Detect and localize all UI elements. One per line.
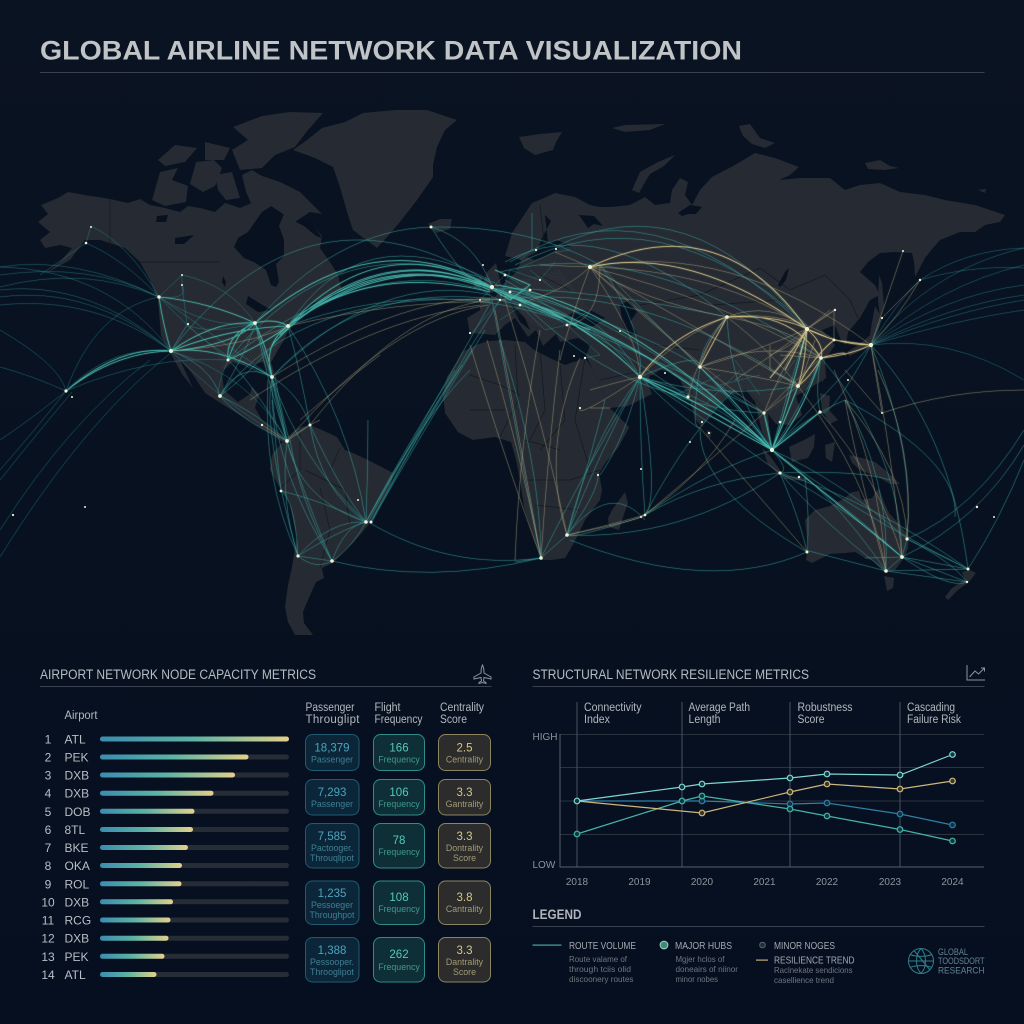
y axis labels (532, 732, 558, 871)
row 6: 8TL: 8TL (64, 823, 86, 837)
card: passenger 7,585: Throuqlipot (310, 853, 355, 863)
card: frequency 106: Frequency (378, 799, 420, 809)
land: africa (443, 340, 629, 560)
card: passenger 7,293 (306, 780, 359, 815)
legend: route volume (532, 941, 636, 984)
chart series headers: Connectivity (584, 702, 642, 714)
logo: global research: TOODSDORT (938, 956, 985, 966)
card: passenger 1,235: Throughpot (310, 910, 355, 920)
row 9: ROL: ROL (64, 877, 90, 891)
card: centrality 3.3: Gantrality (446, 799, 484, 809)
row 7: BKE: BKE (64, 841, 89, 855)
card: passenger 18,379 (306, 734, 359, 770)
column headers: Flight (374, 702, 401, 714)
panel: airport node capacity metrics (40, 665, 492, 982)
land: south america (270, 425, 393, 635)
row 6: 8TL (45, 823, 289, 837)
row 14: ATL (41, 968, 289, 982)
row 12: DXB: 12 (41, 932, 55, 946)
row 6: 8TL: 6 (45, 823, 52, 837)
chart series headers: Failure Risk (907, 714, 961, 726)
legend: resilience trend: casellience trend (774, 975, 834, 985)
land: islands (428, 124, 986, 600)
land: greenland (293, 110, 457, 248)
card: centrality 3.8: 3.8 (456, 892, 472, 904)
column headers: Score (440, 714, 467, 726)
land: eurasia (467, 153, 1005, 452)
y axis labels: LOW (532, 860, 556, 871)
legend: major hubs: doneairs of niinor (676, 964, 738, 974)
row 10: DXB: DXB (64, 895, 89, 909)
legend: resilience trend (756, 956, 854, 985)
column headers: Passenger (306, 702, 355, 714)
row 8: OKA (45, 859, 289, 873)
row 9: ROL: 9 (45, 877, 52, 891)
legend: major hubs: minor nobes (676, 974, 718, 984)
x axis years: 2018 (566, 877, 589, 888)
card: centrality 3.8 (438, 881, 490, 924)
card: passenger 1,235 (306, 881, 359, 924)
row 10: DXB: 10 (41, 895, 55, 909)
row 4: DXB: 4 (45, 787, 52, 801)
series: gold resilience trend (577, 778, 955, 816)
card: centrality 2.5: 2.5 (456, 742, 472, 754)
airport nodes (12, 226, 995, 583)
card: frequency 78: 78 (393, 835, 405, 847)
card: frequency 166: 166 (389, 742, 409, 754)
row 13: PEK: PEK (64, 950, 89, 964)
logo: global research: GLOBAL (938, 947, 968, 957)
row 11: RCG: 11 (42, 914, 55, 928)
chart series headers: Index (584, 714, 610, 726)
land: madagascar (608, 492, 628, 530)
heading: capacity metrics: AIRPORT NETWORK NODE CAPACITY METRICS (40, 667, 316, 682)
card: frequency 262: Frequency (378, 962, 420, 972)
card: passenger 7,585 (306, 824, 359, 868)
card: frequency 262 (374, 938, 424, 982)
row 4: DXB (45, 787, 289, 801)
row 8: OKA: OKA (64, 859, 90, 873)
row 14: ATL: 14 (41, 968, 55, 982)
card: centrality 3.3: 3.3 (456, 787, 472, 799)
legend: route volume: through tciis olid (569, 964, 631, 974)
route network arcs (0, 213, 1024, 584)
row 4: DXB: DXB (64, 787, 89, 801)
card: centrality 3.3 score: Score (453, 853, 476, 863)
row 2: PEK: 2 (45, 750, 52, 764)
row 7: BKE: 7 (45, 841, 52, 855)
x axis years (566, 877, 964, 888)
row 5: DOB: 5 (45, 805, 52, 819)
row 5: DOB: DOB (64, 805, 91, 819)
row 10: DXB (41, 895, 289, 909)
card: frequency 78: Frequency (378, 847, 420, 857)
series: blue (577, 798, 955, 828)
series: teal falling (574, 793, 955, 844)
card: frequency 78 (374, 824, 424, 868)
routes: teal thin (0, 226, 287, 557)
row 3: DXB: DXB (64, 768, 89, 782)
row 12: DXB: DXB (64, 932, 89, 946)
chart series headers (584, 702, 961, 726)
card: centrality 3.3 score (438, 938, 490, 982)
card: centrality 3.3 (438, 780, 490, 815)
panel: structural network resilience metrics (532, 665, 985, 888)
card: centrality 3.3 score: 3.3 (456, 831, 472, 843)
card: passenger 1,388: Throoglipot (310, 967, 355, 977)
legend: resilience trend: Raclnekate sendicions (774, 965, 852, 975)
row 3: DXB (45, 768, 289, 782)
y axis labels: HIGH (532, 732, 558, 743)
logo: global research (908, 947, 985, 976)
row 9: ROL (45, 877, 289, 891)
heading: legend: LEGEND (532, 907, 582, 922)
column headers: Frequency (374, 714, 423, 726)
legend: route volume: discoonery routes (569, 974, 634, 984)
card: passenger 1,235: Pessoeger (311, 900, 353, 910)
legend: major hubs: Mgjer hclos of (676, 954, 725, 964)
land: north america (38, 112, 341, 443)
x axis years: 2020 (691, 877, 714, 888)
row 2: PEK: PEK (64, 750, 89, 764)
card: passenger 1,388 (306, 938, 359, 982)
card: passenger 7,585: Pactooger. (311, 843, 353, 853)
card: frequency 108: Frequency (378, 904, 420, 914)
card: passenger 7,585: 7,585 (318, 831, 346, 843)
card: passenger 7,293: 7,293 (318, 787, 346, 799)
line chart (532, 702, 984, 888)
row 1: ATL (45, 732, 289, 746)
routes: gold bright (590, 246, 871, 386)
row 1: ATL: 1 (45, 732, 52, 746)
city light texture (215, 270, 825, 412)
card: frequency 166: Frequency (378, 754, 420, 764)
legend: resilience trend: RESILIENCE TREND (774, 956, 854, 966)
logo: global research: RESEARCH (938, 966, 984, 976)
chart series headers: Average Path (688, 702, 750, 714)
card: frequency 166 (374, 734, 424, 770)
row 2: PEK (45, 750, 289, 764)
chart series headers: Cascading (907, 702, 955, 714)
card: passenger 18,379: Passenger (311, 754, 353, 764)
row 13: PEK (41, 950, 289, 964)
card: passenger 7,293: Passenger (311, 799, 353, 809)
x axis years: 2021 (753, 877, 776, 888)
x axis years: 2024 (941, 877, 964, 888)
column headers: Centrality (440, 702, 484, 714)
legend: major hubs (660, 941, 738, 984)
row 7: BKE (45, 841, 289, 855)
x axis years: 2023 (879, 877, 902, 888)
row 14: ATL: ATL (64, 968, 86, 982)
row 3: DXB: 3 (45, 768, 52, 782)
legend: route volume: Route valame of (569, 954, 628, 964)
card: passenger 18,379: 18,379 (314, 742, 350, 754)
legend: minor nodes: MINOR NOGES (774, 941, 835, 952)
card: passenger 1,388: 1,388 (318, 945, 346, 957)
routes: dense regional mesh (470, 250, 795, 405)
card: frequency 106 (374, 780, 424, 815)
card: frequency 262: 262 (389, 949, 409, 961)
card: centrality 3.3 score: Score (453, 967, 476, 977)
legend: route volume: ROUTE VOLUME (569, 941, 636, 952)
column headers: Througlipt (306, 714, 360, 726)
card: centrality 3.3 score (438, 824, 490, 868)
panel: legend (532, 907, 985, 985)
row 12: DXB (41, 932, 289, 946)
legend: major hubs: MAJOR HUBS (675, 941, 732, 952)
row 11: RCG (42, 914, 289, 928)
series: light teal rising (574, 752, 955, 804)
chart series headers: Score (798, 714, 824, 726)
card: passenger 1,235: 1,235 (318, 888, 346, 900)
row 11: RCG: RCG (64, 914, 91, 928)
column headers: Airport (64, 710, 98, 722)
chart series headers: Length (688, 714, 720, 726)
row 1: ATL: ATL (64, 732, 86, 746)
card: centrality 3.3 score: 3.3 (456, 945, 472, 957)
title: GLOBAL AIRLINE NETWORK DATA VISUALIZATION (40, 36, 742, 66)
x axis years: 2019 (628, 877, 651, 888)
x axis years: 2022 (816, 877, 839, 888)
card: frequency 108: 108 (389, 892, 409, 904)
chart series headers: Robustness (798, 702, 853, 714)
card: centrality 2.5: Centrality (446, 754, 484, 764)
card: centrality 2.5 (438, 734, 490, 770)
card: frequency 106: 106 (389, 787, 409, 799)
card: centrality 3.8: Cantrality (446, 904, 484, 914)
heading: resilience metrics: STRUCTURAL NETWORK RESILIENCE METRICS (532, 667, 809, 682)
card: centrality 3.3 score: Dontrality (446, 843, 484, 853)
routes: gold thin (171, 251, 1024, 571)
card: passenger 1,388: Pessooper. (310, 957, 354, 967)
row 8: OKA: 8 (45, 859, 52, 873)
icon: airplane (474, 665, 491, 684)
row 5: DOB (45, 805, 289, 819)
row 13: PEK: 13 (41, 950, 55, 964)
card: centrality 3.3 score: Dantrality (446, 957, 484, 967)
country borders (110, 199, 858, 568)
column headers (64, 702, 484, 726)
icon: trend chart (967, 665, 985, 680)
world map (0, 110, 1024, 635)
card: frequency 108 (374, 881, 424, 924)
